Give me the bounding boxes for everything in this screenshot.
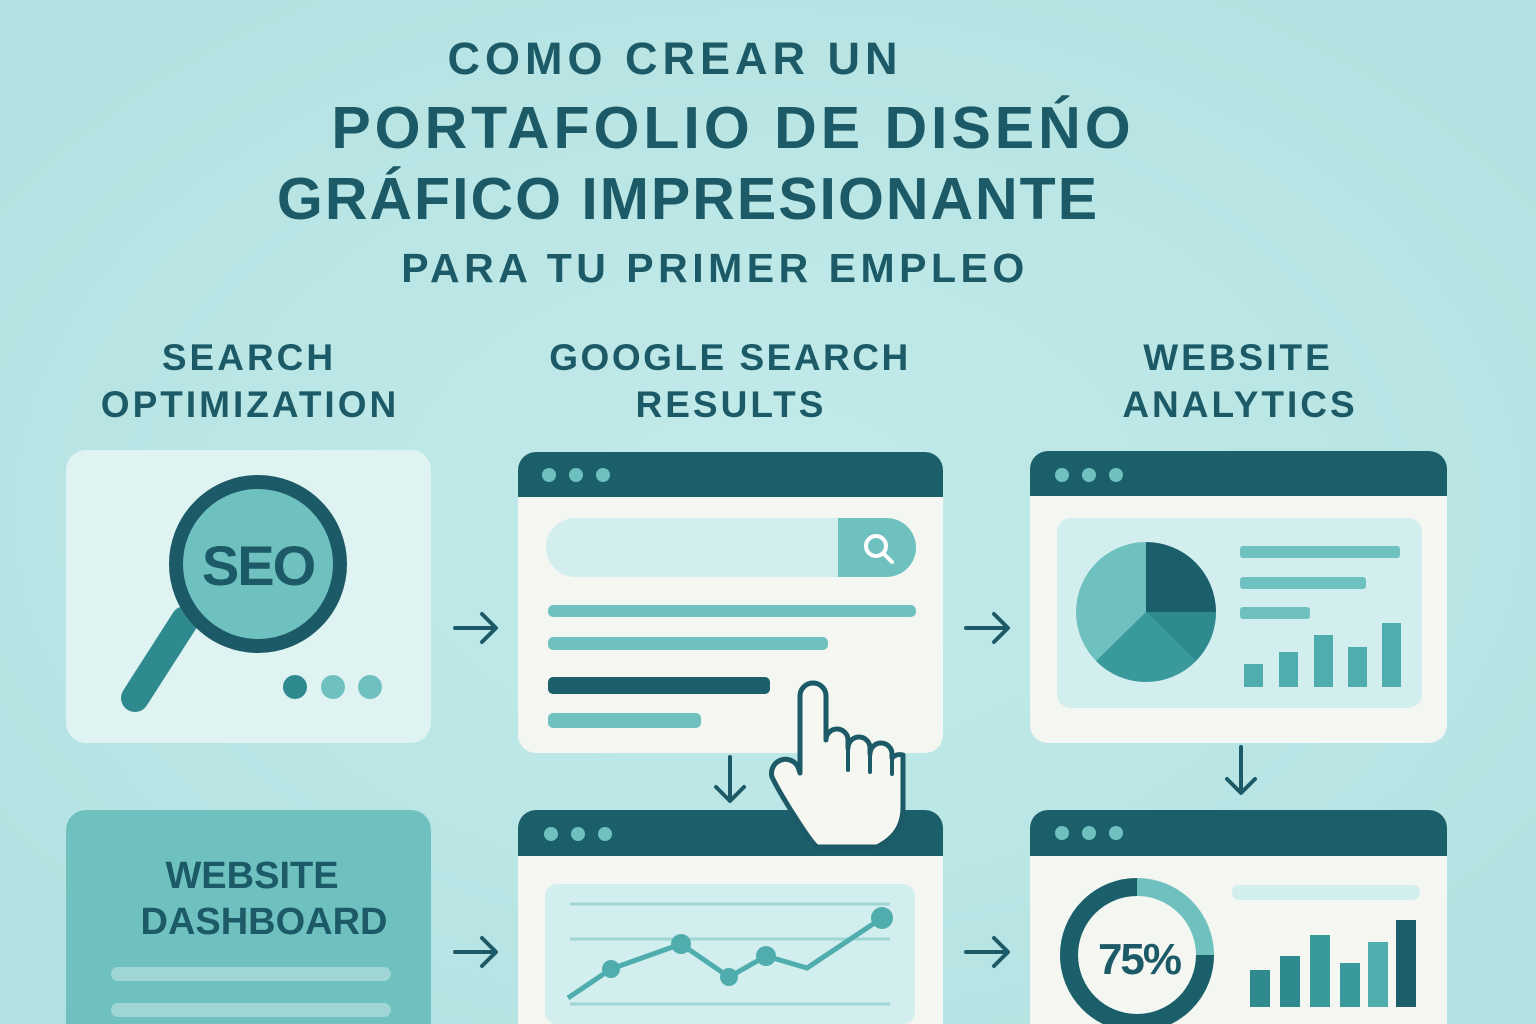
column headings: ANALYTICS <box>1122 384 1358 425</box>
column headings: WEBSITE <box>1143 337 1333 378</box>
pie chart <box>1076 542 1216 682</box>
panel: website dashboard: WEBSITE <box>165 855 339 897</box>
panel: SEO <box>66 450 431 743</box>
column headings: OPTIMIZATION <box>101 384 399 425</box>
bar chart <box>1244 623 1401 687</box>
column headings: SEARCH <box>162 337 336 378</box>
panel: line chart browser <box>518 810 943 1024</box>
title <box>277 33 1135 291</box>
column headings: RESULTS <box>636 384 826 425</box>
bar chart 2 <box>1250 920 1416 1007</box>
line chart <box>568 907 893 998</box>
donut 75% <box>1069 887 1205 1023</box>
panel: 75% browser <box>1030 810 1447 1024</box>
title: GRÁFICO IMPRESIONANTE <box>277 166 1099 232</box>
panel: website dashboard: DASHBOARD <box>140 901 388 943</box>
arrows <box>455 614 1255 966</box>
icon: magnifier SEO <box>135 482 340 698</box>
title: PARA TU PRIMER EMPLEO <box>401 245 1029 291</box>
icon: magnifier SEO: SEO <box>202 534 315 597</box>
icon: hand cursor <box>772 683 903 847</box>
panel: google search browser <box>518 452 943 753</box>
panel: analytics <box>1030 451 1447 743</box>
column headings <box>101 337 1358 425</box>
title: PORTAFOLIO DE DISEŃO <box>331 95 1135 161</box>
column headings: GOOGLE SEARCH <box>549 337 911 378</box>
search bar <box>546 518 916 577</box>
title: COMO CREAR UN <box>448 33 902 84</box>
donut 75%: 75% <box>1098 935 1181 984</box>
panel: website dashboard <box>66 810 431 1024</box>
